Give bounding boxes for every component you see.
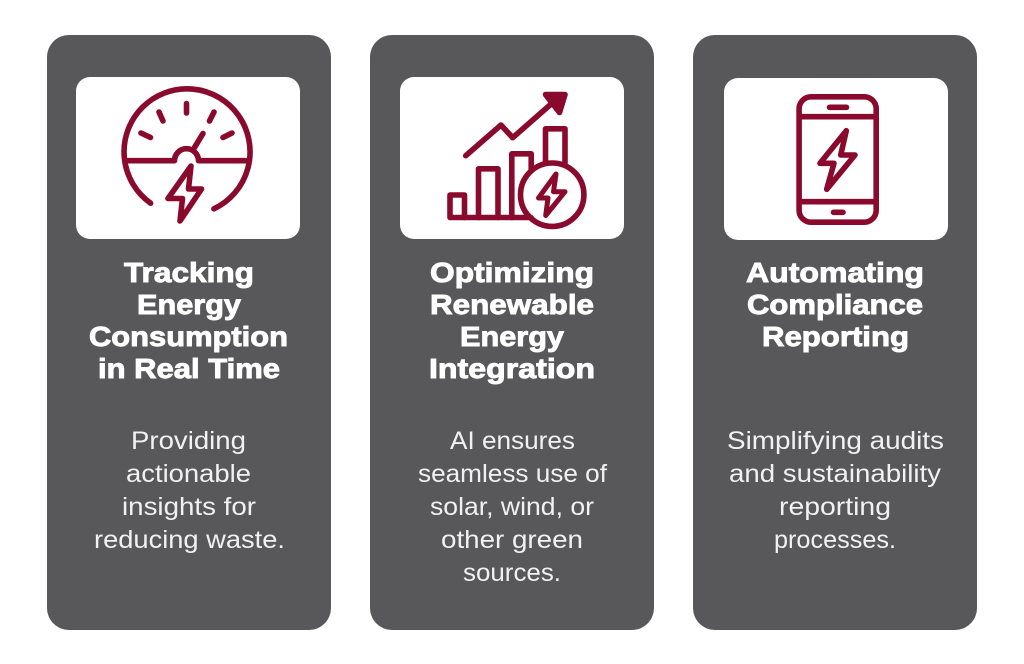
heading: tracking energy consumption in real time: in Real Time xyxy=(98,353,280,384)
body text: providing actionable insights: Providing xyxy=(131,427,246,455)
panel: optimizing renewable energy xyxy=(370,35,654,630)
icon: smartphone with bolt xyxy=(799,97,876,222)
body text: AI ensures seamless use: AI ensures xyxy=(450,427,575,455)
panel: tracking energy consumption xyxy=(47,35,331,630)
heading: tracking energy consumption in real time: Energy xyxy=(137,289,241,320)
heading: optimizing renewable energy integration: Energy xyxy=(460,321,564,352)
icon tile: gauge xyxy=(76,77,300,239)
panel: automating compliance reporting xyxy=(693,35,977,630)
body text: simplifying audits: and sustainability xyxy=(729,460,942,488)
heading: automating compliance reporting: Compliance xyxy=(747,289,923,320)
heading: tracking energy consumption in real time: Tracking xyxy=(124,257,254,288)
heading: tracking energy consumption in real time xyxy=(89,257,288,384)
body text: simplifying audits: Simplifying audits xyxy=(727,427,944,455)
icon: rising bar chart with bolt xyxy=(450,94,584,226)
heading: optimizing renewable energy integration: Integration xyxy=(429,353,595,384)
body text: providing actionable insights: insights for xyxy=(122,493,256,521)
body text: AI ensures seamless use: sources. xyxy=(463,559,561,587)
icon tile: phone xyxy=(724,78,948,240)
body text: AI ensures seamless use xyxy=(418,427,607,587)
heading: optimizing renewable energy integration: Renewable xyxy=(430,289,594,320)
heading: automating compliance reporting: Automating xyxy=(746,257,924,288)
body text: providing actionable insights xyxy=(94,427,285,554)
body text: AI ensures seamless use: solar, wind, or xyxy=(430,493,594,521)
heading: optimizing renewable energy integration: Optimizing xyxy=(430,257,594,288)
body text: providing actionable insights: reducing waste. xyxy=(94,526,285,554)
icon tile: chart xyxy=(400,77,624,239)
heading: automating compliance reporting: Reporting xyxy=(762,321,909,352)
body text: AI ensures seamless use: other green xyxy=(441,526,583,554)
body text: AI ensures seamless use: seamless use of xyxy=(418,460,607,488)
heading: automating compliance reporting xyxy=(746,257,924,352)
heading: optimizing renewable energy integration xyxy=(429,257,595,384)
body text: providing actionable insights: actionable xyxy=(126,460,251,488)
body text: simplifying audits xyxy=(727,427,944,554)
heading: tracking energy consumption in real time: Consumption xyxy=(89,321,288,352)
body text: simplifying audits: processes. xyxy=(774,526,896,554)
icon: gauge with lightning bolt xyxy=(124,89,250,221)
body text: simplifying audits: reporting xyxy=(779,493,891,521)
